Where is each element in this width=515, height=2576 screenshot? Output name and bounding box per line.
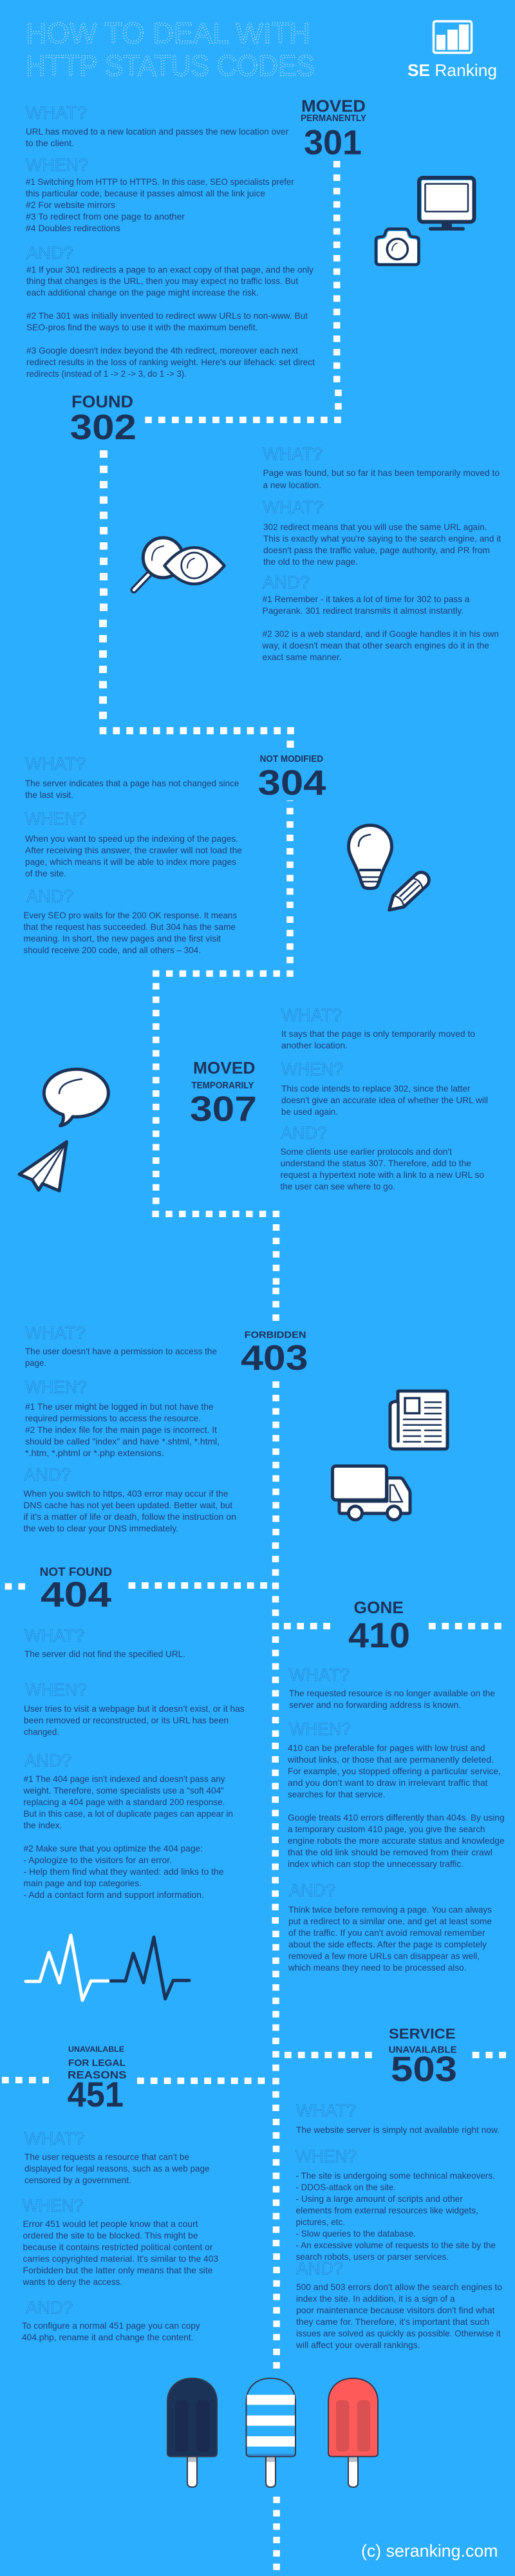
text block: and bbox=[262, 573, 499, 662]
panel: 410 gone bbox=[287, 1598, 505, 1973]
text block: and: issues are solved as quickly as possible. Otherwise it bbox=[296, 2328, 501, 2338]
text block: and: they came for. Therefore, it's important that such bbox=[296, 2316, 489, 2327]
text block: what: server and no forwarding address is known. bbox=[289, 1700, 461, 1710]
text block: and: which means they need to be processed also. bbox=[288, 1962, 466, 1973]
heading: 451: REASONS bbox=[68, 2069, 126, 2081]
text block: and: redirects (instead of 1 -> 2 -> 3, do 1 -> 3). bbox=[26, 368, 187, 379]
text block: and: AND? bbox=[26, 2298, 73, 2318]
text block: what: to the client. bbox=[26, 138, 74, 148]
text block: when: #3 To redirect from one page to another bbox=[26, 211, 185, 222]
text block: and bbox=[23, 1750, 233, 1900]
text block: and: meaning. In short, the new pages and the first visit bbox=[23, 933, 221, 943]
text block: and: AND? bbox=[296, 2259, 343, 2278]
text block: what, second: This is exactly what you're saying to the search engine, and it bbox=[263, 533, 501, 544]
panel: 451 unavailable for legal reasons bbox=[22, 2045, 218, 2342]
arrow: connector to footer bbox=[273, 2253, 280, 2570]
text block: what: a new location. bbox=[263, 480, 321, 490]
text block: what: WHAT? bbox=[289, 1665, 350, 1685]
text block: what: censored by a government. bbox=[24, 2175, 131, 2185]
text block: when bbox=[287, 1719, 505, 1869]
icon: striped popsicle bbox=[246, 2378, 295, 2487]
heading: 302: 302 bbox=[70, 407, 136, 447]
icon: pulse lines bbox=[26, 1935, 189, 2000]
text block: when: that the old link should be removed from their crawl bbox=[288, 1847, 492, 1857]
text block: when bbox=[295, 2146, 496, 2262]
text block: when: #2 For website mirrors bbox=[26, 200, 115, 210]
heading: 302 bbox=[70, 392, 136, 447]
footer credit: (c) seranking.com bbox=[361, 2541, 498, 2561]
heading: 503: SERVICE bbox=[389, 2026, 456, 2042]
text block: and: AND? bbox=[26, 886, 73, 906]
text block: and: replacing a 404 page with a standard 200 response. bbox=[23, 1797, 225, 1807]
icon: navy popsicle bbox=[167, 2378, 217, 2487]
icon: newspaper bbox=[390, 1391, 447, 1449]
text block: and: #1 If your 301 redirects a page to an exact copy of that page, and the only bbox=[26, 264, 314, 274]
text block: what: The user doesn't have a permission to access the bbox=[25, 1346, 217, 1356]
text block: and: the web to clear your DNS immediately. bbox=[23, 1523, 178, 1533]
text block: what: WHAT? bbox=[263, 444, 323, 464]
text block: and: SEO-pros find the ways to use it with the maximum benefit. bbox=[26, 322, 258, 332]
heading: 304: 304 bbox=[258, 762, 326, 802]
text block: and: - Help them find what they wanted: add links to the bbox=[23, 1866, 224, 1877]
text block: and: AND? bbox=[26, 243, 73, 263]
text block: when: #1 The user might be logged in but not have the bbox=[25, 1401, 214, 1412]
text block: and: about the side effects. After the page is completely bbox=[288, 1939, 487, 1949]
text block: when: doesn't give an accurate idea of whether the URL will bbox=[281, 1095, 488, 1105]
text block: and bbox=[281, 1122, 484, 1191]
arrow: connector 302 to 304 bbox=[100, 450, 294, 748]
icon: magnifier and eye bbox=[134, 538, 224, 590]
text block: and: poor maintenance because visitors don't find what bbox=[296, 2305, 495, 2315]
text block: when: WHEN? bbox=[25, 1377, 87, 1397]
text block: when: Forbidden but the latter only means that the site bbox=[23, 2265, 213, 2275]
text block: and: #2 Make sure that you optimize the 404 page: bbox=[23, 1843, 203, 1853]
heading: 451: FOR LEGAL bbox=[68, 2058, 126, 2069]
text block: and: index the site. In addition, it is a sign of a bbox=[296, 2293, 455, 2304]
text block: what: WHAT? bbox=[281, 1005, 342, 1025]
text block: and: AND? bbox=[281, 1122, 327, 1142]
text block: and: Some clients use earlier protocols and don't bbox=[281, 1146, 452, 1157]
text block: when: When you want to speed up the indexing of the pages. bbox=[25, 833, 238, 844]
text block: and bbox=[23, 1464, 236, 1533]
text block: when: been removed or reconstructed, or its URL has been bbox=[24, 1715, 229, 1725]
heading: 451: 451 bbox=[68, 2074, 124, 2114]
text block: and: each additional change on the page might increase the risk. bbox=[26, 287, 259, 298]
heading: 403: 403 bbox=[241, 1338, 308, 1378]
text block: and: exact same manner. bbox=[263, 652, 341, 662]
text block: and: 404.php, rename it and change the content. bbox=[22, 2332, 193, 2342]
heading: 503: 503 bbox=[391, 2049, 457, 2089]
text block: when: without links, or those that are permanently deleted. bbox=[287, 1754, 494, 1765]
icon: speech bubble bbox=[44, 1069, 108, 1126]
text block: what: another location. bbox=[281, 1040, 348, 1050]
text block: when: WHEN? bbox=[25, 1680, 87, 1700]
panel: 503 service unavailable bbox=[295, 2026, 502, 2350]
panel: 302 found bbox=[70, 392, 501, 662]
heading: 451 bbox=[68, 2045, 126, 2114]
text block: and: should receive 200 code, and all others – 304. bbox=[23, 945, 201, 955]
text block: what: The user requests a resource that can't be bbox=[24, 2152, 189, 2162]
text block: and: 500 and 503 errors don't allow the search engines to bbox=[296, 2282, 502, 2292]
text block: what bbox=[24, 1625, 185, 1659]
panel: 307 moved temporarily bbox=[19, 1005, 488, 1191]
text block: and: that the request has succeeded. But 304 has the same bbox=[23, 922, 236, 932]
text block: and: of the traffic. If you can't avoid removal remember bbox=[288, 1927, 485, 1938]
text block: and bbox=[26, 243, 315, 379]
text block: when: *.htm, *.phtml or *.php extensions. bbox=[25, 1448, 164, 1458]
heading: 307: MOVED bbox=[193, 1058, 255, 1077]
text block: when: After receiving this answer, the crawler will not load the bbox=[25, 845, 242, 855]
text block: and: #1 The 404 page isn't indexed and doesn't pass any bbox=[23, 1774, 225, 1784]
heading: 304: NOT MODIFIED bbox=[260, 753, 323, 764]
text block: when: elements from external resources like widgets, bbox=[296, 2205, 478, 2215]
icon: red popsicle bbox=[328, 2378, 378, 2487]
text block: and: Think twice before removing a page. You can always bbox=[288, 1904, 492, 1915]
text block: and: #2 302 is a web standard, and if Google handles it in his own bbox=[263, 629, 499, 639]
text block: what: displayed for legal reasons, such as a web page bbox=[24, 2163, 210, 2174]
heading: 301: MOVED bbox=[301, 97, 366, 116]
heading: 503: UNAVAILABLE bbox=[389, 2045, 457, 2056]
text block: what bbox=[24, 2128, 210, 2185]
text block: when bbox=[25, 1377, 220, 1458]
text block: what: WHAT? bbox=[296, 2101, 356, 2121]
text block: when: Google treats 410 errors differently than 404s. By using bbox=[288, 1812, 505, 1823]
text block: and bbox=[295, 2259, 502, 2350]
text block: what bbox=[25, 753, 239, 800]
text block: when: This code intends to replace 302, since the latter bbox=[281, 1083, 471, 1094]
text block: what, second: 302 redirect means that you will use the same URL again. bbox=[263, 522, 487, 532]
text block: what bbox=[263, 444, 500, 490]
text block: when: this particular code, because it passes almost all the link juice bbox=[26, 188, 265, 198]
text block: when: carries copyrighted material. It's similar to the 403 bbox=[23, 2253, 218, 2264]
text block: when: WHEN? bbox=[23, 2195, 83, 2215]
text block: what, second: the old to the new page. bbox=[263, 556, 358, 567]
heading: 301: PERMANENTLY bbox=[301, 113, 366, 124]
panel: 304 not modified bbox=[23, 753, 432, 955]
text block: and: weight. Therefore, some specialists use a "soft 404" bbox=[23, 1785, 224, 1795]
text block: when: - DDOS-attack on the site. bbox=[296, 2182, 396, 2192]
arrow: connector 304 to 307 bbox=[153, 801, 294, 1204]
text block: and bbox=[23, 886, 237, 955]
arrow: connector 403 to 404 and 410 bbox=[5, 1381, 501, 1737]
text block: when: WHEN? bbox=[289, 1719, 351, 1739]
arrow: connector 301 to 302 bbox=[145, 161, 341, 420]
text block: what: Page was found, but so far it has been temporarily moved to bbox=[263, 468, 500, 478]
text block: when: 410 can be preferable for pages with low trust and bbox=[288, 1743, 485, 1753]
text block: and: the index. bbox=[23, 1820, 62, 1830]
panel: 404 not found bbox=[23, 1566, 245, 2000]
text block: and: AND? bbox=[289, 1880, 335, 1900]
text block: what: URL has moved to a new location and passes the new location over bbox=[26, 126, 288, 137]
text block: and: Every SEO pro waits for the 200 OK response. It means bbox=[23, 910, 237, 920]
text block: when: User tries to visit a webpage but it doesn’t exist, or it has bbox=[24, 1703, 245, 1714]
arrow: connector 410 to 451 and 503 bbox=[2, 1743, 506, 2246]
text block: when: page, which means it will be able to index more pages bbox=[25, 857, 236, 867]
text block: when: #4 Doubles redirections bbox=[26, 223, 120, 233]
text block: what: WHAT? bbox=[26, 103, 87, 122]
text block: and: #1 Remember - it takes a lot of time for 302 to pass a bbox=[263, 594, 470, 604]
text block: and: request a hypertext note with a link to a new URL so bbox=[281, 1170, 484, 1180]
text block: and: But in this case, a lot of duplicate pages can appear in bbox=[23, 1808, 233, 1819]
text block: what: The server did not find the specified URL. bbox=[24, 1649, 185, 1659]
text block: and: the user can see where to go. bbox=[281, 1181, 395, 1191]
text block: and: #3 Google doesn't index beyond the 4th redirect, moreover each next bbox=[26, 345, 298, 355]
panel: 301 moved permanently bbox=[26, 97, 474, 379]
text block: and: - Add a contact form and support information. bbox=[23, 1889, 204, 1900]
text block: and: understand the status 307. Therefore, add to the bbox=[281, 1158, 471, 1168]
text block: and: #2 The 301 was initially invented to redirect www URLs to non-www. But bbox=[26, 310, 308, 321]
text block: when: engine robots the more accurate status and knowledge bbox=[288, 1835, 505, 1846]
text block: when: WHEN? bbox=[295, 2146, 357, 2166]
text block: when: WHEN? bbox=[26, 155, 88, 175]
text block: what, second: WHAT? bbox=[263, 497, 323, 517]
title bbox=[26, 17, 315, 82]
text block: when: ordered the site to be blocked. This might be bbox=[23, 2230, 198, 2240]
text block: when: - Using a large amount of scripts and other bbox=[296, 2193, 463, 2204]
text block: when: because it contains restricted political content or bbox=[23, 2242, 213, 2252]
text block: and: redirect results in the loss of ranking weight. Here's our lifehack: set direct bbox=[26, 357, 315, 367]
text block: and: When you switch to https, 403 error may occur if the bbox=[23, 1488, 229, 1499]
text block: what: WHAT? bbox=[24, 1625, 84, 1645]
heading: 410: GONE bbox=[354, 1598, 404, 1617]
text block: when: changed. bbox=[24, 1727, 59, 1737]
text block: and: main page and top categories. bbox=[23, 1878, 142, 1888]
text block: what bbox=[289, 1665, 495, 1710]
text block: when: WHEN? bbox=[24, 808, 86, 828]
icon: truck bbox=[332, 1466, 410, 1520]
text block: what bbox=[281, 1005, 475, 1050]
text block: what: It says that the page is only temporarily moved to bbox=[281, 1028, 475, 1039]
text block: when: WHEN? bbox=[281, 1059, 343, 1079]
text block: what, second bbox=[263, 497, 501, 567]
text block: when: a temporary custom 410 page, you give the search bbox=[288, 1824, 485, 1834]
heading: 404: NOT FOUND bbox=[40, 1566, 112, 1578]
text block: and bbox=[288, 1880, 492, 1973]
text block: when: and you don’t want to draw in irrelevant traffic that bbox=[288, 1777, 488, 1788]
text block: what, second: doesn't pass the traffic value, page authority, and PR from bbox=[263, 545, 490, 555]
logo: SE Ranking: SE Ranking bbox=[407, 61, 497, 80]
text block: what: The server indicates that a page has not changed since bbox=[25, 778, 239, 788]
text block: when: search robots, users or parser services. bbox=[296, 2251, 449, 2262]
text block: when: #2 The index file for the main page is incorrect. It bbox=[25, 1425, 217, 1435]
text block: what: The website server is simply not available right now. bbox=[296, 2125, 500, 2135]
text block: and: AND? bbox=[24, 1750, 71, 1770]
text block: when: - Slow queries to the database. bbox=[296, 2228, 416, 2239]
text block: when bbox=[24, 1680, 245, 1737]
text block: when: #1 Switching from HTTP to HTTPS. In this case, SEO specialists prefer bbox=[26, 176, 294, 187]
heading: 404: 404 bbox=[41, 1575, 111, 1615]
text block: when bbox=[26, 155, 294, 233]
text block: when bbox=[281, 1059, 488, 1117]
text block: when: should be called "index" and have *.shtml, *.html, bbox=[25, 1436, 220, 1446]
text block: when: required permissions to access the resource. bbox=[25, 1413, 201, 1423]
text block: and: To configure a normal 451 page you can copy bbox=[22, 2320, 200, 2331]
text block: what bbox=[26, 103, 288, 148]
text block: when: - The site is undergoing some technical makeovers. bbox=[296, 2170, 495, 2181]
heading: 307: TEMPORARILY bbox=[191, 1080, 254, 1091]
text block: and: put a redirect to a similar one, and get at least some bbox=[288, 1916, 492, 1926]
text block: and: AND? bbox=[263, 573, 310, 592]
heading: 307 bbox=[190, 1058, 257, 1129]
text block: and bbox=[22, 2298, 200, 2342]
text block: when: Error 451 would let people know that a court bbox=[23, 2219, 198, 2229]
logo: SE Ranking bbox=[407, 21, 497, 80]
panel: 403 forbidden bbox=[23, 1323, 447, 1533]
arrow: connector 307 to 403 bbox=[152, 1214, 279, 1321]
text block: what bbox=[296, 2101, 500, 2135]
text block: when: of the site. bbox=[25, 868, 66, 878]
heading: 410: 410 bbox=[348, 1615, 410, 1655]
text block: and: will affect your overall rankings. bbox=[295, 2340, 420, 2350]
text block: and: thing that changes is the URL, then you may expect no traffic loss. But bbox=[26, 276, 298, 286]
text block: when: be used again. bbox=[281, 1106, 338, 1117]
text block: what bbox=[25, 1323, 217, 1368]
text block: when bbox=[23, 2195, 218, 2287]
text block: when: - An excessive volume of requests to the site by the bbox=[296, 2240, 496, 2250]
text block: what: The requested resource is no longer available on the bbox=[289, 1688, 495, 1698]
text block: what: WHAT? bbox=[25, 1323, 86, 1343]
title: HTTP STATUS CODES bbox=[26, 49, 315, 82]
heading: 410 bbox=[348, 1598, 410, 1655]
text block: what: page. bbox=[25, 1358, 46, 1368]
text block: when: wants to deny the access. bbox=[23, 2277, 122, 2287]
text block: what: the last visit. bbox=[25, 790, 73, 800]
text block: and: - Apologize to the visitors for an error. bbox=[23, 1855, 172, 1865]
heading: 503 bbox=[389, 2026, 457, 2089]
heading: 451: UNAVAILABLE bbox=[68, 2045, 124, 2054]
text block: when: searches for that service. bbox=[288, 1789, 385, 1799]
text block: and: removed a few more URLs can disappear as well, bbox=[288, 1951, 480, 1961]
heading: 301: 301 bbox=[304, 124, 362, 162]
icon: pencil bbox=[384, 869, 432, 916]
heading: 307: 307 bbox=[190, 1089, 257, 1129]
text block: and: AND? bbox=[24, 1464, 71, 1484]
icon: light bulb bbox=[349, 826, 391, 889]
text block: and: way, it doesn't mean that other search engines do it in the bbox=[262, 640, 489, 650]
text block: what: WHAT? bbox=[24, 2128, 84, 2148]
text block: when: index which can stop the unnecessary traffic. bbox=[288, 1859, 464, 1869]
icon: camera bbox=[376, 229, 418, 265]
text block: what: WHAT? bbox=[25, 753, 86, 773]
heading: 404 bbox=[40, 1566, 112, 1615]
text block: and: if it's a matter of life or death, follow the instruction on bbox=[23, 1511, 236, 1522]
text block: when: For example, you stopped offering a particular service, bbox=[288, 1766, 501, 1776]
title: HOW TO DEAL WITH bbox=[26, 17, 310, 50]
text block: when: pictures, etc. bbox=[296, 2217, 345, 2227]
icon: paper plane bbox=[19, 1142, 67, 1191]
heading: 302: FOUND bbox=[71, 392, 133, 411]
text block: when bbox=[24, 808, 242, 878]
text block: and: DNS cache has not yet been updated. Better wait, but bbox=[23, 1500, 232, 1510]
heading: 301 bbox=[301, 97, 366, 162]
heading: 403: FORBIDDEN bbox=[245, 1329, 306, 1340]
text block: and: Pagerank. 301 redirect transmits it almost instantly. bbox=[263, 605, 464, 616]
icon: monitor bbox=[419, 178, 474, 231]
